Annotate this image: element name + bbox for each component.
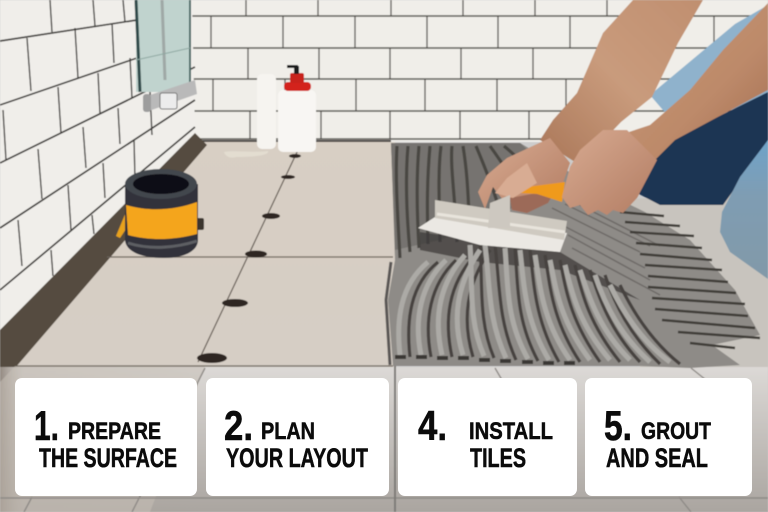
adhesive mortar bed [386,143,760,368]
card: step 4 install tiles [398,378,577,496]
tile spacers [197,154,301,363]
card: step 5 grout and seal: 5. [604,402,632,449]
right floor concrete [620,190,768,367]
card: step 5 grout and seal [585,378,752,496]
tile joints [16,150,393,366]
orange trowel handle [518,182,565,202]
lower wavy ridge highlights [399,245,670,362]
card: step 4 install tiles: INSTALL [469,418,553,445]
dark adhesive strip along wall [0,133,207,382]
left hand [478,138,570,213]
step cards [15,378,752,496]
ridge end shadows [395,355,575,365]
card: step 4 install tiles: TILES [470,443,526,473]
card: step 1 prepare the surface [15,378,197,496]
rag on floor [224,151,268,158]
floor tiles [10,142,395,368]
trowel [418,195,567,252]
white tube [257,74,276,149]
card: step 2 plan your layout: YOUR LAYOUT [226,443,368,473]
horizontal combed edge [620,212,760,348]
card: step 1 prepare the surface: PREPARE [68,418,161,445]
thumb [495,163,537,198]
card: step 2 plan your layout: 2. [224,402,253,449]
right arm [610,3,768,165]
bottle with red pump [278,65,316,152]
back wall tiles [185,0,768,144]
card: step 5 grout and seal: AND SEAL [606,443,708,473]
light blue jeans [650,5,768,130]
card: step 2 plan your layout: PLAN [261,418,315,445]
lower fingers on handle [510,193,552,213]
floor strip below [0,367,768,512]
right hand [562,130,657,215]
glass shower panel [136,0,197,112]
upper trowel ridges [391,143,560,250]
card: step 1 prepare the surface: THE SURFACE [39,443,177,473]
dark jeans [637,92,768,205]
card: step 4 install tiles: 4. [418,402,447,449]
card: step 1 prepare the surface: 1. [34,402,59,449]
card: step 2 plan your layout [206,378,389,496]
diagonal ridges right of trowel [552,204,660,295]
trowel shadow [420,232,640,300]
left wall tiles [0,0,195,330]
bucket [116,169,204,258]
knee light jeans [720,140,768,279]
left arm [540,0,703,165]
lower wavy grooves [409,245,680,364]
card: step 5 grout and seal: GROUT [641,418,711,445]
